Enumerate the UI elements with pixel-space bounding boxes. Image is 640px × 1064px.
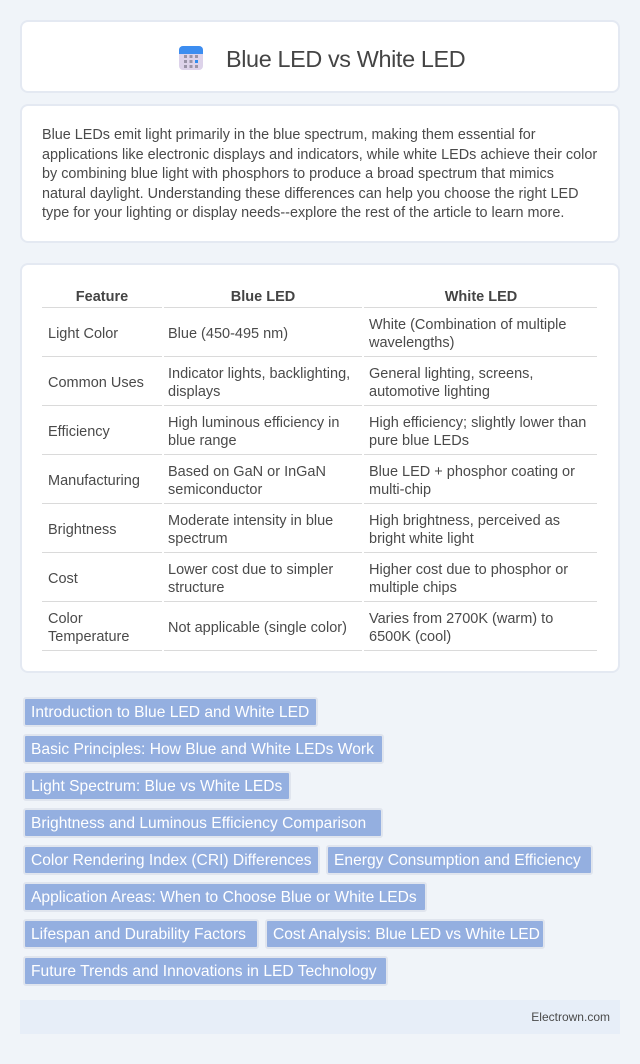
intro paragraph: natural daylight. Understanding these differences can help you choose the right LED: [42, 186, 579, 202]
footer: [20, 1000, 620, 1034]
row: cost: [48, 562, 568, 596]
table header: Blue LED: [231, 289, 295, 305]
row: efficiency: [48, 415, 586, 449]
intro paragraph: applications like electronic displays and indicators, while white LEDs achieve their color: [42, 146, 597, 162]
row: cost: Lower cost due to simpler: [168, 562, 333, 578]
tag: [23, 956, 388, 986]
tag: Brightness and Luminous Efficiency Comparison: [31, 815, 366, 832]
intro paragraph: Blue LEDs emit light primarily in the blue spectrum, making them essential for: [42, 127, 535, 143]
row: common uses: [48, 366, 533, 400]
intro paragraph: [42, 127, 597, 221]
icon: calendar: [179, 46, 203, 70]
row: common uses: automotive lighting: [369, 384, 490, 400]
comparison table panel: [20, 263, 620, 673]
tag: [23, 771, 291, 801]
title: Blue LED vs White LED: [226, 46, 465, 72]
row: common uses: Common Uses: [48, 375, 144, 391]
tag: [23, 882, 427, 912]
intro paragraph: type for your lighting or display needs--explore the rest of the article to learn more.: [42, 205, 564, 221]
row: common uses: Indicator lights, backlighting,: [168, 366, 350, 382]
tag: Introduction to Blue LED and White LED: [31, 704, 309, 721]
row: color temperature: Varies from 2700K (warm) to: [369, 611, 553, 627]
row: color temperature: Temperature: [48, 629, 129, 645]
row: brightness: [48, 513, 560, 547]
tag: Light Spectrum: Blue vs White LEDs: [31, 778, 282, 795]
tag: Basic Principles: How Blue and White LEDs Work: [31, 741, 374, 758]
intro paragraph: by combining blue light with phosphors to produce a broad spectrum that mimics: [42, 166, 554, 182]
row: efficiency: pure blue LEDs: [369, 433, 469, 449]
tag: [23, 919, 259, 949]
row: light color: Blue (450-495 nm): [168, 326, 288, 342]
row: color temperature: Color: [48, 611, 83, 627]
tag: [23, 845, 320, 875]
row: brightness: Moderate intensity in blue: [168, 513, 333, 529]
tag: Cost Analysis: Blue LED vs White LED: [273, 926, 540, 943]
row: manufacturing: multi-chip: [369, 482, 431, 498]
row: color temperature: Not applicable (single color): [168, 620, 347, 636]
intro panel: [20, 104, 620, 243]
table: [42, 289, 597, 651]
row: brightness: bright white light: [369, 531, 474, 547]
row: brightness: High brightness, perceived as: [369, 513, 560, 529]
topic tags: [23, 697, 593, 986]
row: efficiency: Efficiency: [48, 424, 110, 440]
row: cost: Cost: [48, 571, 78, 587]
row: brightness: Brightness: [48, 522, 117, 538]
row: manufacturing: semiconductor: [168, 482, 262, 498]
tag: [23, 734, 384, 764]
header panel: [20, 20, 620, 93]
table header: Feature: [76, 289, 128, 305]
row: cost: Higher cost due to phosphor or: [369, 562, 568, 578]
table header: White LED: [445, 289, 517, 305]
row: efficiency: High luminous efficiency in: [168, 415, 339, 431]
row: manufacturing: [48, 464, 575, 498]
row: color temperature: 6500K (cool): [369, 629, 451, 645]
tag: [23, 808, 383, 838]
row: light color: wavelengths): [369, 335, 454, 351]
tag: Lifespan and Durability Factors: [31, 926, 246, 943]
row: manufacturing: Blue LED + phosphor coating or: [369, 464, 575, 480]
row: light color: [48, 317, 566, 351]
row: common uses: displays: [168, 384, 220, 400]
row: manufacturing: Based on GaN or InGaN: [168, 464, 326, 480]
tag: [326, 845, 593, 875]
tag: Application Areas: When to Choose Blue or White LEDs: [31, 889, 417, 906]
row: light color: White (Combination of multiple: [369, 317, 566, 333]
row: efficiency: High efficiency; slightly lower than: [369, 415, 586, 431]
row: brightness: spectrum: [168, 531, 228, 547]
tag: [23, 697, 318, 727]
row: manufacturing: Manufacturing: [48, 473, 140, 489]
tag: [265, 919, 545, 949]
row: color temperature: [48, 611, 553, 645]
footer credit: Electrown.com: [531, 1010, 610, 1024]
tag: Color Rendering Index (CRI) Differences: [31, 852, 312, 869]
row: cost: multiple chips: [369, 580, 457, 596]
table header: [76, 289, 517, 305]
row: light color: Light Color: [48, 326, 118, 342]
tag: Energy Consumption and Efficiency: [334, 852, 581, 869]
row: efficiency: blue range: [168, 433, 237, 449]
row: cost: structure: [168, 580, 224, 596]
row: common uses: General lighting, screens,: [369, 366, 533, 382]
tag: Future Trends and Innovations in LED Technology: [31, 963, 377, 980]
